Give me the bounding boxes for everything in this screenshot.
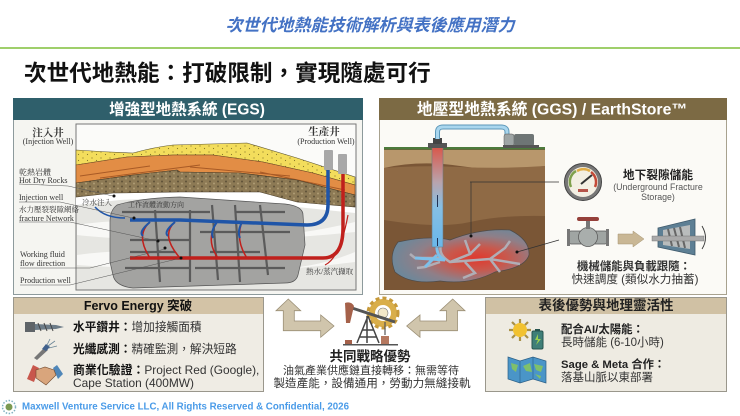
panel: Fervo Energy	[14, 298, 264, 392]
EGS diagram	[19, 124, 356, 290]
EGS diagram labels: Working fluid	[20, 250, 65, 259]
EGS diagram labels: 乾熱岩體	[19, 167, 51, 177]
panel: EGS	[13, 98, 363, 294]
Fervo heading: Fervo Energy 突破	[84, 298, 193, 313]
text: AI and solar pairing: 長時儲能 (6-10小時)	[561, 336, 664, 349]
text: underground fracture storage: 地下裂隙儲能	[623, 168, 693, 182]
EGS diagram labels: 熱水/蒸汽擷取	[306, 266, 354, 276]
EGS diagram labels: 生產井	[308, 125, 340, 138]
main heading: 次世代地熱能：打破限制，實現隨處可行	[24, 61, 431, 86]
EGS diagram labels: Production well	[20, 276, 72, 285]
EGS diagram labels: (Injection Well)	[23, 137, 74, 146]
text: Sage and Meta cooperation: 落基山脈以東部署	[561, 370, 653, 384]
text: underground fracture storage	[613, 168, 703, 202]
GGS underground diagram	[384, 127, 559, 290]
arrow: right bent arrow	[407, 299, 465, 337]
text: AI and solar pairing	[561, 322, 664, 349]
text: shared strategic advantages	[273, 348, 471, 390]
text: shared strategic advantages: 共同戰略優勢	[330, 348, 411, 364]
text: Sage and Meta cooperation	[561, 357, 665, 384]
text: mechanical storage and load following	[572, 259, 699, 286]
icon: turbine	[652, 219, 706, 255]
icon: fiber optics	[34, 339, 57, 360]
icon: valve	[567, 217, 609, 246]
text: mechanical storage and load following: 快速調度 (類似水力抽蓄)	[572, 272, 699, 286]
arrow: valve to turbine	[618, 231, 644, 247]
EGS diagram labels: fracture Network	[19, 214, 74, 223]
icon: pressure gauge	[564, 164, 602, 200]
icon: sun and battery	[509, 319, 543, 349]
EGS diagram labels: Hot Dry Rocks	[19, 176, 67, 185]
panel: behind-the-meter advantages	[486, 297, 726, 392]
text: underground fracture storage: Storage)	[641, 192, 675, 202]
EGS diagram labels	[19, 125, 355, 285]
EGS diagram labels: 水力壓裂裂隙網絡	[19, 204, 79, 214]
EGS diagram labels: Injection well	[19, 193, 64, 202]
footer logo	[2, 400, 16, 414]
text: commercial validation: Cape Station (400MW)	[73, 376, 194, 390]
icon: handshake	[27, 365, 63, 385]
EGS heading: 增強型地熱系統 (EGS)	[109, 100, 265, 118]
text: commercial validation	[73, 363, 259, 390]
text: shared strategic advantages: 油氣產業供應鏈直接轉移：無需等待	[283, 363, 459, 377]
footer text: Maxwell Venture Service LLC, All Rights Reserved & Confidential, 2026	[22, 402, 350, 412]
EGS diagram labels: (Production Well)	[297, 137, 355, 146]
EGS diagram labels: 工作流體流動方向	[128, 200, 184, 209]
text: horizontal drilling: 水平鑽井：增加接觸面積	[73, 320, 202, 334]
EGS diagram labels: flow direction	[20, 259, 65, 268]
text: Sage and Meta cooperation: Sage & Meta 合作：	[561, 357, 665, 371]
text: underground fracture storage: (Underground Fracture	[613, 182, 703, 192]
text: AI and solar pairing: 配合AI/太陽能：	[561, 322, 644, 336]
text: mechanical storage and load following: 機械儲能與負載跟隨：	[577, 259, 691, 273]
text: shared strategic advantages: 製造產能，設備通用，勞動力無縫接軌	[273, 376, 471, 390]
top title: 次世代地熱能技術解析與表後應用潛力	[226, 16, 516, 35]
GGS heading: 地壓型地熱系統 (GGS) / EarthStore™	[417, 100, 687, 118]
text: fiber sensing: 光纖感測：精確監測，解決短路	[73, 342, 237, 356]
text: commercial validation: 商業化驗證：Project Red (Google),	[73, 363, 259, 377]
icon: drill	[25, 322, 64, 332]
icon: world map	[508, 357, 546, 383]
arrow: left bent arrow	[276, 299, 334, 337]
icon: pump jack and gear	[343, 298, 398, 346]
behind-the-meter heading: 表後優勢與地理靈活性	[538, 297, 674, 313]
panel: GGS	[379, 98, 727, 294]
EGS diagram labels: 注入井	[32, 126, 64, 139]
EGS diagram labels: 冷水注入	[82, 197, 112, 207]
